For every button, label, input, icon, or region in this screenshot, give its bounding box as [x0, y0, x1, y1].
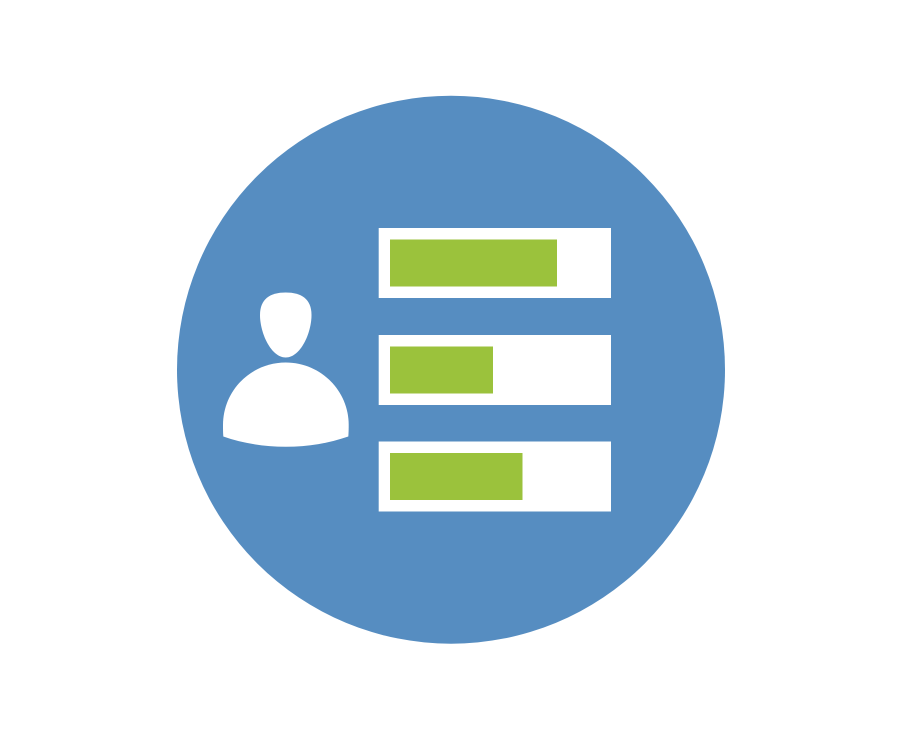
bar 3 — [379, 442, 611, 512]
bar 1 — [379, 228, 611, 298]
icon: user — [223, 292, 349, 447]
bar 2 fill — [390, 346, 493, 394]
bar 2 — [379, 335, 611, 405]
user head — [260, 292, 312, 358]
bar 3 track — [379, 442, 611, 512]
bar 2 track — [379, 335, 611, 405]
bar 1 track — [379, 228, 611, 298]
user shoulders — [223, 362, 349, 447]
bar 1 fill — [390, 240, 557, 286]
bar 3 fill — [390, 453, 522, 500]
blue circle background — [177, 96, 725, 644]
